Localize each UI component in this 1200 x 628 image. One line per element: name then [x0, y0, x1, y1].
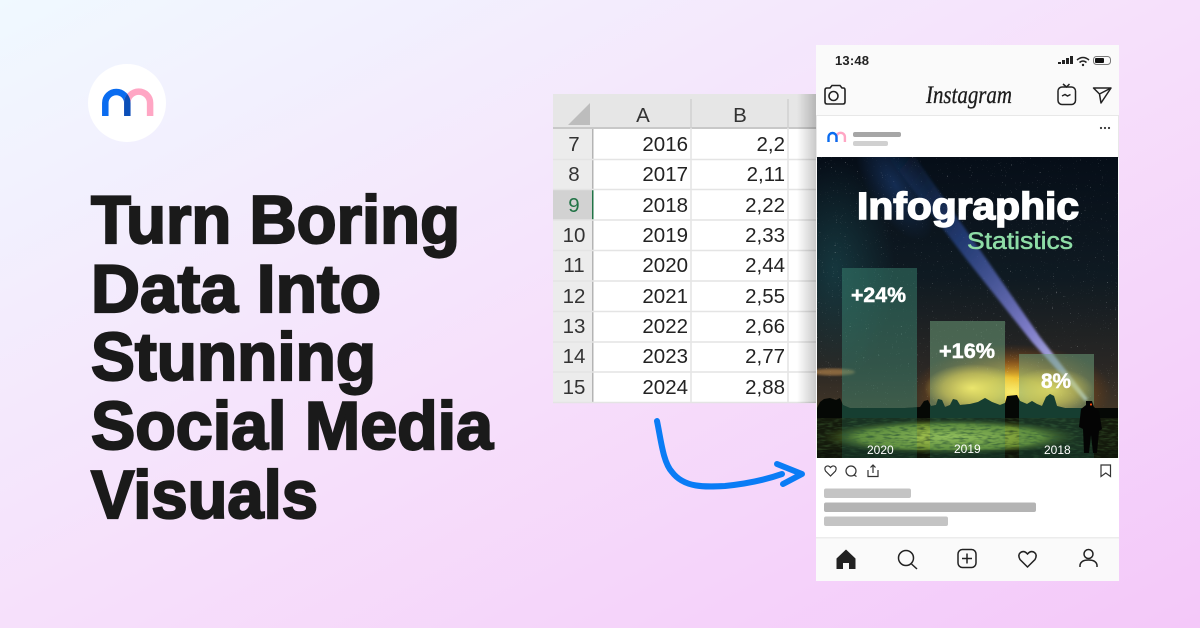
column headers: A [636, 104, 650, 127]
title: Stunning [91, 319, 376, 395]
title: Social Media [91, 388, 494, 464]
row numbers: 8 [568, 163, 580, 186]
bar values: 8% [1041, 370, 1071, 393]
row numbers: 9 [568, 194, 580, 217]
row numbers [563, 133, 585, 399]
column headers [636, 104, 747, 127]
column A values: 2019 [642, 224, 688, 247]
bar 2020 [842, 268, 917, 408]
bar values: +24% [851, 284, 906, 307]
row numbers: 12 [563, 285, 585, 308]
bar 2019 [930, 321, 1005, 407]
row numbers: 11 [563, 254, 585, 277]
column A values: 2021 [642, 285, 688, 308]
column B values: 2,55 [745, 285, 785, 308]
status bar [835, 53, 1110, 68]
year labels: 2018 [1044, 443, 1071, 457]
bar 2018 [1019, 354, 1094, 408]
column headers: B [733, 104, 747, 127]
bar values: +16% [939, 340, 995, 363]
bottom navigation [816, 537, 1119, 569]
year labels: 2019 [954, 442, 981, 456]
spreadsheet [553, 94, 817, 403]
post footer [816, 458, 1119, 537]
column A values: 2018 [642, 194, 688, 217]
column B values: 2,22 [745, 194, 785, 217]
title: Visuals [91, 457, 318, 533]
column A values: 2022 [642, 315, 688, 338]
column A values: 2017 [642, 163, 688, 186]
column B values: 2,2 [756, 133, 785, 156]
phone mockup [816, 45, 1119, 581]
column B values: 2,88 [745, 376, 785, 399]
column B values: 2,11 [747, 163, 785, 186]
column B values: 2,44 [745, 254, 785, 277]
action icons [825, 465, 1110, 476]
column A values: 2016 [642, 133, 688, 156]
photo [817, 157, 1118, 458]
column A values: 2024 [642, 376, 688, 399]
icon: camera [825, 86, 845, 104]
year labels [868, 444, 1070, 454]
title: Turn Boring [91, 182, 460, 258]
column A values [642, 133, 688, 399]
photo title: Infographic [857, 186, 1079, 228]
photo subtitle: Statistics [967, 228, 1073, 255]
column B values: 2,66 [745, 315, 785, 338]
row numbers: 15 [563, 376, 585, 399]
bar values [851, 284, 1071, 393]
logo badge [88, 64, 166, 142]
title: Data Into [91, 251, 381, 327]
caption placeholders [824, 488, 1036, 526]
more menu [1100, 127, 1110, 129]
title [91, 182, 494, 533]
column A values: 2020 [642, 254, 688, 277]
icon: send [1094, 88, 1111, 103]
row numbers: 7 [568, 133, 580, 156]
column B values [745, 133, 785, 399]
row numbers: 13 [563, 315, 585, 338]
column A values: 2023 [642, 345, 688, 368]
arrow [657, 421, 802, 486]
tree line and meadow [817, 390, 1118, 458]
year labels: 2020 [867, 443, 894, 457]
mini logo [828, 133, 845, 142]
column B values: 2,77 [745, 345, 785, 368]
post header [816, 116, 1118, 158]
icon: igtv [1058, 84, 1076, 104]
row numbers: 10 [563, 224, 585, 247]
instagram wordmark: Instagram [925, 82, 1012, 109]
column B values: 2,33 [745, 224, 785, 247]
row numbers: 14 [563, 345, 585, 368]
status bar: 13:48 [835, 53, 869, 68]
person with flashlight [1079, 401, 1102, 453]
